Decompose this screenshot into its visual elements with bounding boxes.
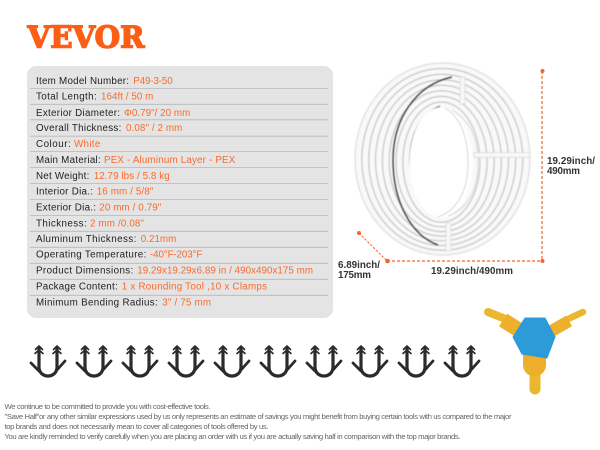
panel: specification table: White	[74, 139, 101, 150]
dimension: width 19.29inch/490mm	[385, 259, 544, 277]
dimension: height 19.29inch/490mm: 490mm	[547, 166, 580, 177]
panel: specification table: P49-3-50	[133, 76, 173, 87]
panel: specification table: Net Weight:	[36, 171, 89, 182]
icons: row of ten pipe clamps	[31, 346, 479, 376]
panel: specification table: 12.79 lbs / 5.8 kg	[94, 171, 170, 182]
panel: specification table: Aluminum Thickness:	[36, 234, 136, 245]
dimension: depth 6.89inch/175mm	[338, 231, 387, 281]
panel: specification table: Colour:	[36, 139, 71, 150]
panel: specification table: Minimum Bending Radius:	[36, 298, 158, 309]
panel: specification table: 0.08" / 2 mm	[126, 123, 182, 134]
panel: specification table: Exterior Diameter:	[36, 108, 120, 119]
dimension: depth 6.89inch/175mm: 6.89inch/	[338, 260, 380, 271]
icon: pipe clamp 10	[445, 346, 479, 376]
panel: specification table: Exterior Dia.:	[36, 203, 96, 214]
footer: disclaimer text	[4, 402, 512, 441]
panel: specification table: Main Material:	[36, 155, 101, 166]
panel: specification table: 19.29x19.29x6.89 in / 490x490x175 mm	[137, 266, 313, 277]
footer: disclaimer text: top brands and does not necessarily mean to cover all categories of tools offered by us.	[4, 422, 268, 431]
panel: specification table: Total Length:	[36, 92, 97, 103]
panel: specification table: 0.21mm	[141, 234, 176, 245]
panel: specification table: Interior Dia.:	[36, 187, 93, 198]
panel: specification table: 1 x Rounding Tool ,10 x Clamps	[122, 282, 267, 293]
product photo: white PEX pipe coil	[355, 63, 530, 255]
panel: specification table: 2 mm /0.08"	[90, 219, 145, 230]
panel: specification table: Product Dimensions:	[36, 266, 133, 277]
icon: pipe clamp 7	[307, 346, 341, 376]
dimension: height 19.29inch/490mm	[540, 69, 595, 261]
footer: disclaimer text: We continue to be committed to provide you with cost-effective tools.	[4, 402, 211, 411]
panel: specification table: Thickness:	[36, 219, 87, 230]
panel: specification table: Overall Thickness:	[36, 123, 121, 134]
dimension: width 19.29inch/490mm: 19.29inch/490mm	[431, 266, 513, 277]
panel: specification table: Item Model Number:	[36, 76, 129, 87]
icon: pipe clamp 4	[169, 346, 203, 376]
panel: specification table: Package Content:	[36, 282, 118, 293]
icon: pipe clamp 9	[399, 346, 433, 376]
icon: pipe clamp 5	[215, 346, 249, 376]
icon: pipe clamp 6	[261, 346, 295, 376]
panel: specification table: 3" / 75 mm	[162, 298, 211, 309]
icon: pipe clamp 3	[123, 346, 157, 376]
footer: disclaimer text: "Save Half"or any other similar expressions used by us only represents an estimate of savings you might benefit from buying certain tools with us compared to the major	[4, 412, 512, 421]
icon: pipe clamp 1	[31, 346, 65, 376]
panel: specification table: -40°F-203°F	[150, 250, 202, 261]
panel: specification table: Operating Temperature:	[36, 250, 146, 261]
dimension: height 19.29inch/490mm: 19.29inch/	[547, 156, 595, 167]
product photo: rounding tool	[488, 312, 583, 389]
logo: VEVOR: VEVOR	[27, 20, 146, 56]
footer: disclaimer text: You are kindly reminded to verify carefully when you are placing an order with us if you are actually saving half in comparison with the top major brands.	[4, 432, 460, 441]
panel: specification table	[27, 66, 333, 318]
icon: pipe clamp 2	[77, 346, 111, 376]
dimension: depth 6.89inch/175mm: 175mm	[338, 270, 371, 281]
panel: specification table: Φ0.79"/ 20 mm	[124, 108, 190, 119]
panel: specification table: 20 mm / 0.79"	[99, 203, 162, 214]
panel: specification table: PEX - Aluminum Layer - PEX	[104, 155, 236, 166]
icon: pipe clamp 8	[353, 346, 387, 376]
panel: specification table: 164ft / 50 m	[101, 92, 153, 103]
panel: specification table: 16 mm / 5/8"	[97, 187, 154, 198]
